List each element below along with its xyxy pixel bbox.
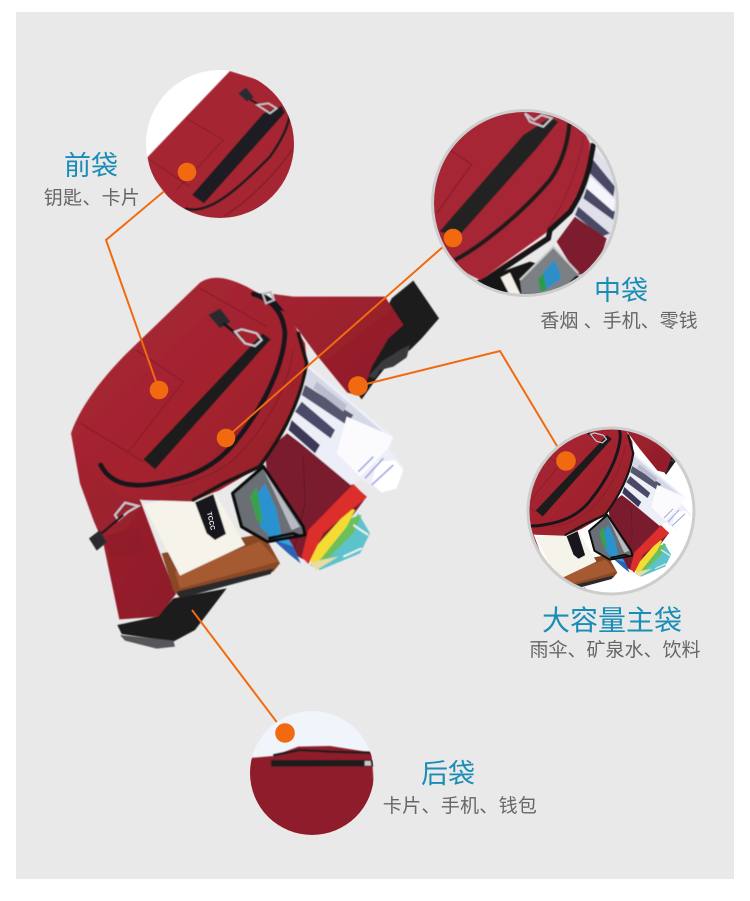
marker dots — [150, 163, 576, 743]
top wing — [273, 294, 403, 396]
contents at bottom — [473, 262, 587, 300]
top strap — [350, 281, 439, 399]
fabric behind — [557, 217, 607, 275]
detail circle: rear pocket — [250, 711, 374, 835]
label: main compartment — [529, 605, 701, 661]
detail circle: front pocket — [146, 70, 300, 223]
red pocket — [430, 105, 590, 280]
umbrella — [265, 433, 367, 560]
label: main compartment: 大容量主袋 — [542, 605, 682, 636]
detail circle: main compartment — [526, 426, 696, 596]
label: front pocket: 前袋 — [64, 151, 118, 181]
rear body — [71, 433, 176, 619]
callout lines — [106, 172, 566, 733]
brand label on power bank: TCCC — [205, 511, 216, 531]
label: front pocket — [44, 151, 140, 209]
label: middle pocket: 香烟 、手机、零钱 — [540, 310, 698, 332]
label: rear pocket — [383, 759, 537, 817]
label: rear pocket: 后袋 — [421, 759, 475, 789]
label: rear pocket: 卡片、手机、钱包 — [383, 795, 537, 817]
front body — [71, 278, 307, 502]
bottom strap — [117, 588, 227, 642]
bottle in circle — [573, 148, 620, 238]
label: middle pocket — [540, 276, 698, 332]
water bottle — [287, 364, 403, 493]
label: main compartment: 雨伞、矿泉水、饮料 — [529, 639, 701, 661]
main bag illustration — [71, 278, 439, 649]
zipper pull — [208, 308, 231, 328]
wallet — [162, 533, 280, 596]
label: middle pocket: 中袋 — [594, 276, 648, 306]
label: front pocket: 钥匙、卡片 — [44, 187, 140, 209]
power bank — [143, 492, 245, 576]
glasses — [233, 467, 305, 542]
detail circle: middle pocket — [430, 105, 620, 300]
